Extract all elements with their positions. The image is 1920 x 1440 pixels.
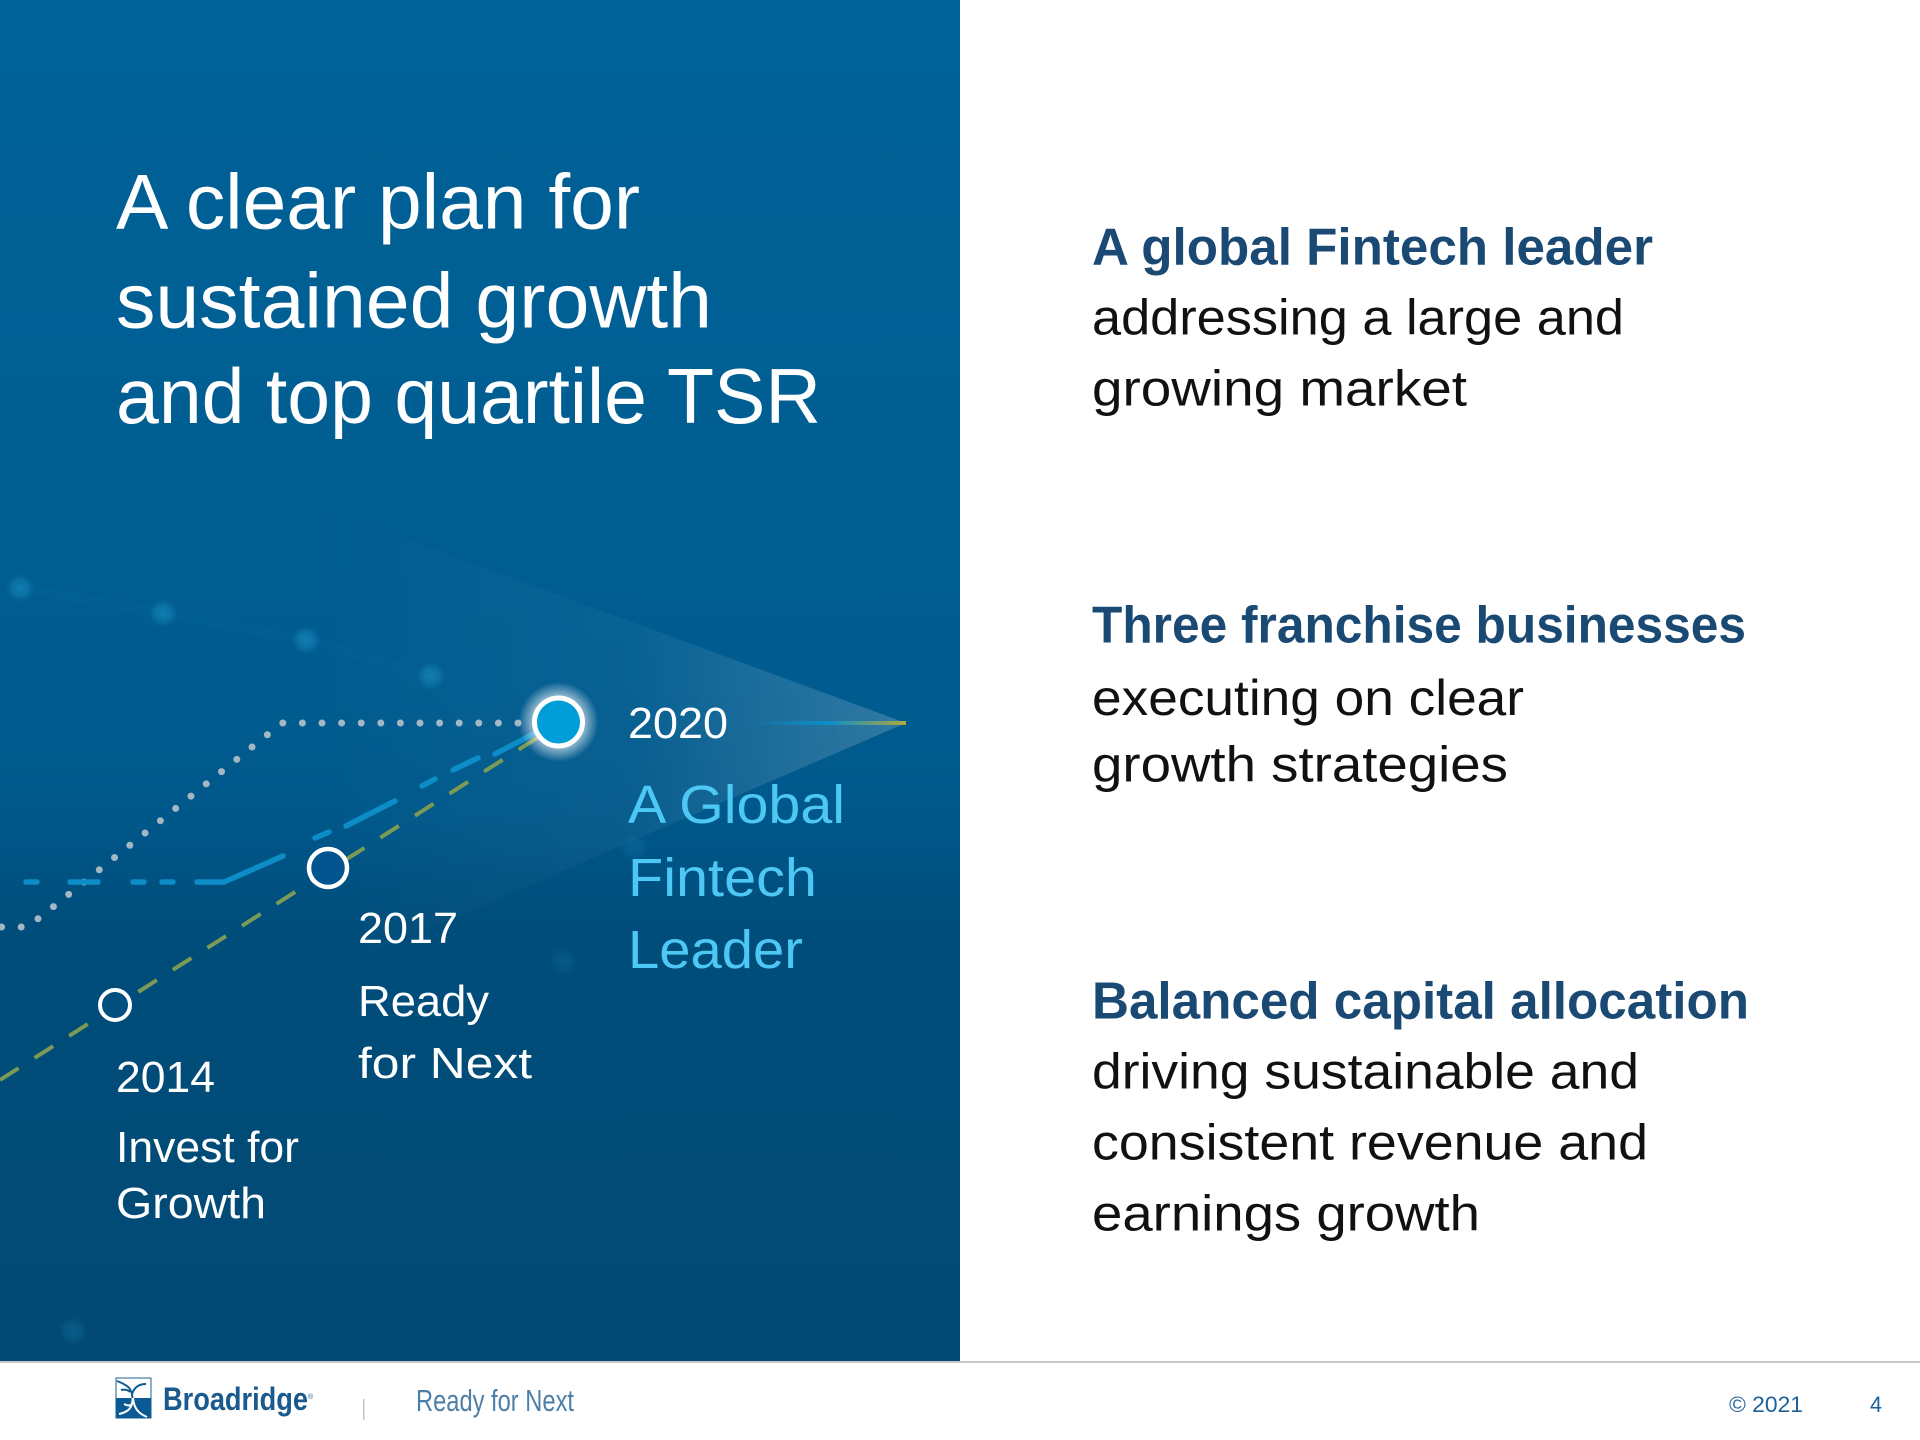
title — [116, 158, 821, 440]
text block: balanced capital allocation: consistent revenue and — [1092, 1114, 1648, 1170]
blue dashed path — [26, 731, 539, 882]
title: sustained growth — [116, 256, 712, 344]
text block: three franchise businesses: executing on clear — [1092, 670, 1524, 726]
light ray at cone tip — [753, 721, 906, 725]
text block: global Fintech leader: addressing a large and — [1092, 290, 1624, 346]
milestone: 2020: 2020 — [628, 699, 728, 748]
panel: blue left panel — [0, 0, 960, 1362]
text block: balanced capital allocation: Balanced capital allocation — [1092, 972, 1749, 1030]
title: and top quartile TSR — [116, 352, 821, 440]
faint background dots — [6, 574, 648, 1345]
text block: balanced capital allocation: driving sustainable and — [1092, 1044, 1639, 1100]
olive dashed path — [0, 736, 540, 1080]
milestone: 2020: Fintech — [628, 848, 817, 908]
title: A clear plan for — [116, 158, 640, 246]
copyright: © 2021 — [1729, 1392, 1803, 1417]
milestone: 2017: for Next — [358, 1039, 532, 1088]
registered mark: ® — [308, 1393, 314, 1401]
text block: balanced capital allocation: earnings growth — [1092, 1186, 1480, 1242]
milestone: 2014: Growth — [116, 1179, 266, 1228]
page number: 4 — [1870, 1392, 1882, 1417]
divider — [363, 1399, 364, 1420]
milestone: 2017: Ready — [358, 977, 489, 1026]
text block: global Fintech leader: growing market — [1092, 360, 1467, 416]
milestone: 2014 — [100, 990, 299, 1228]
light cone pointing right — [306, 502, 906, 955]
text block: global Fintech leader — [1092, 218, 1653, 416]
milestone: 2014: 2014 — [116, 1053, 215, 1102]
dotted grey path — [0, 723, 518, 927]
milestone: 2020: A Global — [628, 775, 845, 835]
milestone: 2020: Leader — [628, 920, 803, 980]
logo wordmark: Broadridge — [163, 1381, 308, 1417]
text block: three franchise businesses: growth strategies — [1092, 736, 1508, 792]
milestone: 2014: Invest for — [116, 1123, 299, 1172]
tagline: Ready for Next — [416, 1383, 574, 1418]
text block: global Fintech leader: A global Fintech leader — [1092, 218, 1653, 276]
milestone: 2017 — [309, 849, 532, 1088]
text block: balanced capital allocation — [1092, 972, 1749, 1242]
milestone: 2017: 2017 — [358, 904, 458, 953]
chart: growth timeline — [0, 502, 906, 1345]
text block: three franchise businesses — [1092, 596, 1746, 792]
text block: three franchise businesses: Three franchise businesses — [1092, 596, 1746, 654]
icon: Broadridge logo mark — [116, 1378, 151, 1418]
milestone: 2020 — [518, 682, 845, 980]
footer — [0, 1361, 1920, 1420]
